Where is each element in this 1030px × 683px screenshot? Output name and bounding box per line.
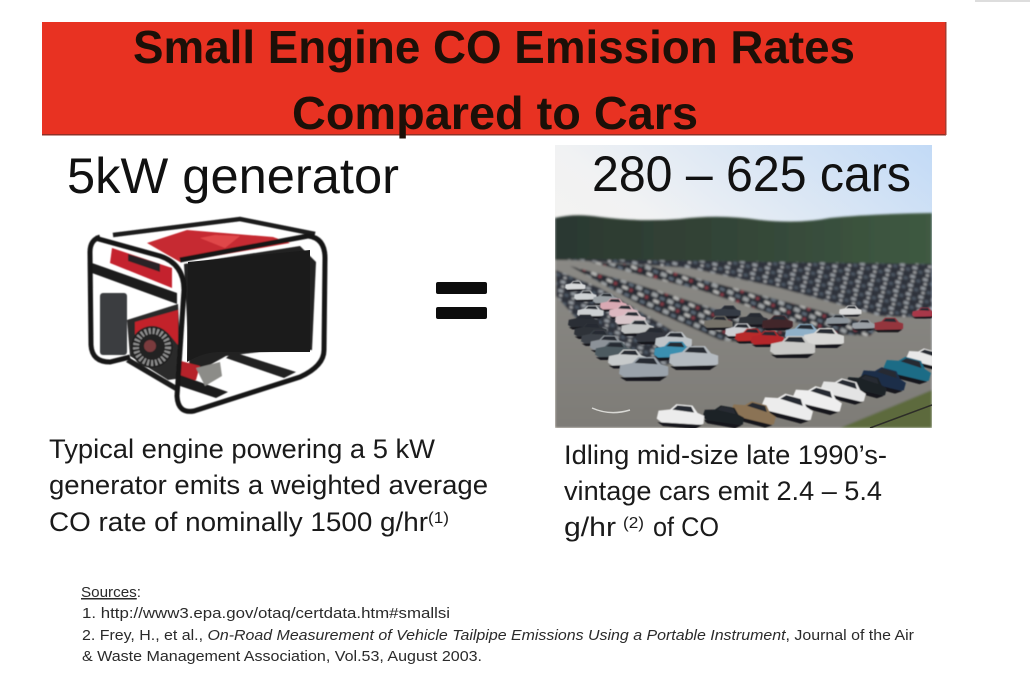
- title: Compared to Cars: [292, 87, 698, 139]
- text block: car emissions: g/hr: [564, 512, 616, 542]
- text block: car emissions: (2): [623, 515, 644, 532]
- red top panel: [147, 230, 290, 262]
- generator body: [184, 246, 316, 376]
- sources: & Waste Management Association, Vol.53, August 2003.: [82, 648, 482, 665]
- base rails: [126, 358, 177, 392]
- sources: Sources:: [81, 584, 141, 601]
- tie rail: [92, 263, 177, 304]
- equals sign: [436, 282, 487, 319]
- text block: generator emissions: CO rate of nominally 1500 g/hr: [49, 507, 428, 537]
- title banner: [42, 21, 946, 139]
- parked car rows: [555, 259, 932, 318]
- text block: generator emissions: (1): [428, 510, 449, 527]
- text block: generator emissions: Typical engine powering a 5 kW: [49, 434, 436, 464]
- photo: parking lot full of cars: [555, 145, 946, 430]
- red tank: [110, 248, 172, 288]
- heading: 280 – 625 cars: 280 – 625 cars: [592, 146, 911, 202]
- front frame: [95, 236, 325, 411]
- sources: [81, 584, 914, 665]
- recoil starter: [131, 326, 173, 368]
- text block: generator emissions: generator emits a weighted average: [49, 470, 488, 500]
- top right edge strip: [975, 0, 1030, 2]
- title: Small Engine CO Emission Rates: [133, 21, 855, 73]
- text block: generator emissions: [49, 434, 488, 537]
- back frame: [113, 219, 315, 235]
- text block: car emissions: [564, 440, 887, 542]
- text block: car emissions: vintage cars emit 2.4 – 5.4: [564, 476, 882, 506]
- engine: [127, 304, 182, 380]
- title: [133, 21, 855, 139]
- redaction box: [187, 250, 310, 362]
- fuel tank: [100, 293, 127, 355]
- sources: 1. http://www3.epa.gov/otaq/certdata.htm#smallsi: [82, 605, 450, 622]
- heading: 5kW generator: 5kW generator: [67, 148, 399, 204]
- text block: car emissions: of CO: [653, 512, 719, 542]
- row two cars: [714, 306, 741, 318]
- text block: car emissions: Idling mid-size late 1990’s-: [564, 440, 887, 470]
- near row cars: [906, 348, 932, 370]
- sources: 2. Frey, H., et al., On-Road Measurement of Vehicle Tailpipe Emissions Using a Portable Instrument , Journal of the Air: [82, 627, 914, 644]
- row one cars: [565, 281, 586, 291]
- far side cars: [912, 308, 935, 318]
- left frame: [90, 237, 130, 362]
- icon: portable generator: [90, 219, 325, 411]
